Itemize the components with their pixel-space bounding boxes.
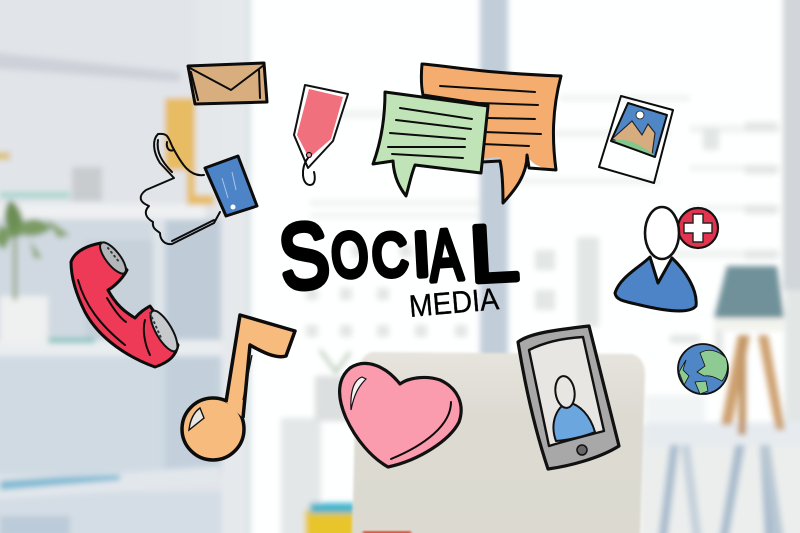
icon: photo <box>599 96 673 183</box>
icon: thumbs up <box>141 134 257 244</box>
subtitle: MEDIA: MEDIA <box>408 281 501 324</box>
icon: envelope <box>188 63 267 104</box>
plant and counter <box>281 418 321 533</box>
left wall and shelves <box>0 0 250 533</box>
icon: globe <box>678 344 728 394</box>
icon: heart <box>340 363 461 467</box>
window building <box>300 95 780 258</box>
icon: telephone handset <box>71 239 182 367</box>
icon: green speech bubble <box>373 92 488 196</box>
icon: smartphone <box>518 326 619 469</box>
title: SOCIAL: A <box>427 215 465 297</box>
icon: orange speech bubble <box>421 63 561 203</box>
title: SOCIAL <box>274 202 521 310</box>
title: SOCIAL: I <box>411 220 432 290</box>
title: SOCIAL: C <box>369 219 411 290</box>
lower right room <box>640 425 800 533</box>
title: SOCIAL: O <box>328 218 371 292</box>
title: SOCIAL: S <box>274 202 334 310</box>
window column <box>480 0 508 360</box>
icon: music note <box>182 315 295 460</box>
icon: add contact <box>615 207 718 311</box>
chair back <box>352 352 645 533</box>
title: SOCIAL: L <box>467 207 521 299</box>
icon: price tag <box>294 85 348 185</box>
